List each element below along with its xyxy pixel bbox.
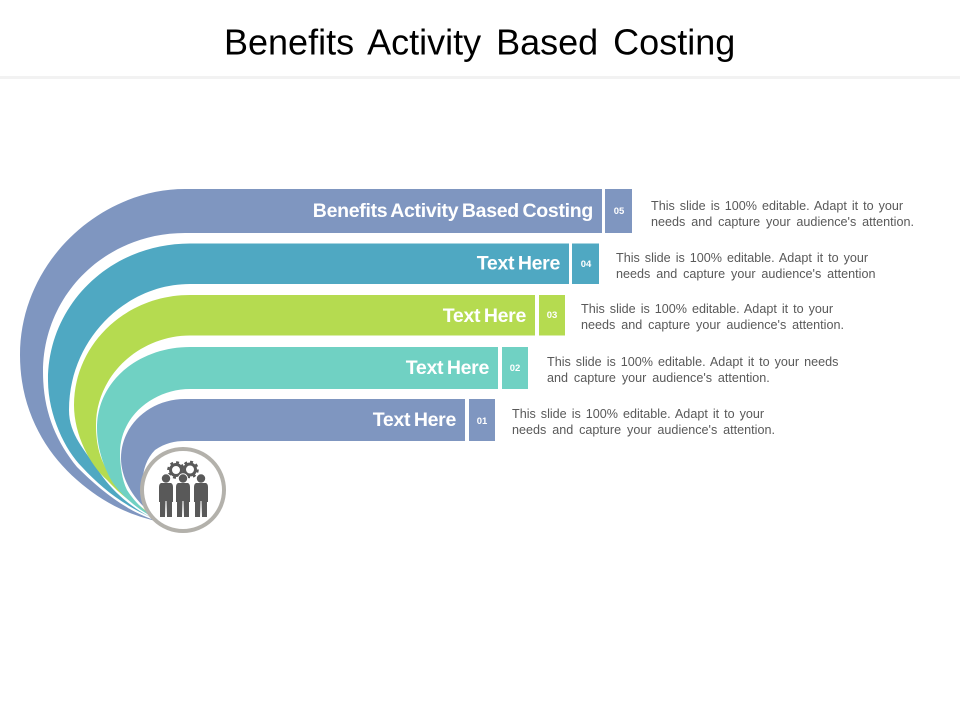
text block 04: This slide is 100% editable. Adapt it to your <box>616 251 868 265</box>
band 5: Benefits Activity Based Costing: Benefits Activity Based Costing <box>313 200 593 222</box>
text block 05: This slide is 100% editable. Adapt it to your <box>651 199 903 213</box>
band 2: Text Here <box>406 357 489 379</box>
band 1 <box>121 399 465 523</box>
tag 01: 01 <box>477 416 488 427</box>
tag 01 <box>469 399 495 441</box>
text block 04: needs and capture your audience's attention <box>616 267 875 281</box>
band 4: Text Here <box>477 252 560 274</box>
text block 02: and capture your audience's attention. <box>547 371 770 385</box>
band 4 <box>48 244 569 523</box>
tag 04: 04 <box>581 259 592 270</box>
band 3 <box>74 295 535 523</box>
icon: team with gears <box>142 449 224 531</box>
tag 02 <box>502 347 528 389</box>
text block 03: needs and capture your audience's attention. <box>581 318 844 332</box>
text block 02: This slide is 100% editable. Adapt it to your needs <box>547 355 838 369</box>
band 3: Text Here <box>443 305 526 327</box>
text block 03: This slide is 100% editable. Adapt it to your <box>581 302 833 316</box>
tag 03 <box>539 295 565 336</box>
tag 02: 02 <box>510 363 520 374</box>
text block 01: needs and capture your audience's attention. <box>512 423 775 437</box>
tag 05: 05 <box>614 206 625 217</box>
tag 03: 03 <box>547 310 557 321</box>
band 5: Benefits Activity Based Costing <box>20 189 602 523</box>
text block 05: needs and capture your audience's attention. <box>651 215 914 229</box>
tag 05 <box>605 189 632 233</box>
band 1: Text Here <box>373 409 456 431</box>
band 2 <box>97 347 498 523</box>
tag 04 <box>572 244 599 284</box>
text block 01: This slide is 100% editable. Adapt it to your <box>512 407 764 421</box>
title: Benefits Activity Based Costing <box>224 22 735 62</box>
